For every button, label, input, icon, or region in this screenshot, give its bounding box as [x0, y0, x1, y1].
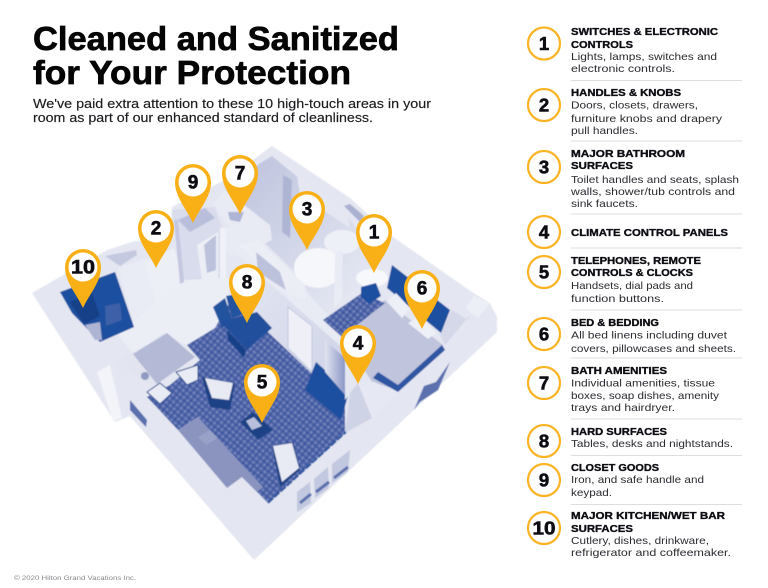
pin 1: 1: [369, 222, 380, 244]
legend item 7: Individual amenities, tissue: [571, 378, 715, 390]
pin 4: [340, 325, 376, 384]
legend item 9: Iron, and safe handle and: [571, 474, 704, 486]
legend item 6: [528, 317, 736, 355]
pin 3: 3: [302, 200, 312, 220]
legend item 1: Lights, lamps, switches and: [571, 51, 717, 63]
pin 6: 6: [417, 278, 427, 300]
wall shading next to tv: [325, 340, 345, 395]
legend item 9: [528, 462, 704, 499]
alcove floor: [213, 190, 272, 248]
legend item 4: CLIMATE CONTROL PANELS: [571, 227, 728, 239]
pin 3: [289, 191, 325, 250]
column at pin four: [345, 382, 398, 433]
legend item 2: furniture knobs and drapery: [571, 113, 723, 125]
pin 7: 7: [235, 164, 245, 184]
legend item 10: Cutlery, dishes, drinkware,: [571, 535, 709, 547]
legend item 10: 10: [532, 518, 556, 538]
legend item 4: [528, 216, 728, 248]
lower windows: [297, 450, 350, 512]
legend item 5: function buttons.: [571, 293, 664, 305]
right wall shading: [440, 310, 470, 345]
legend item 2: HANDLES & KNOBS: [571, 87, 681, 99]
title: [33, 20, 399, 91]
legend item 8: HARD SURFACES: [571, 426, 667, 438]
legend item 10: [528, 510, 731, 559]
legend item 9: keypad.: [571, 487, 612, 499]
top right bathroom wall back: [225, 156, 378, 320]
inner vertical wall: [282, 175, 292, 238]
pin 10: 10: [71, 258, 95, 278]
tv console: [305, 362, 349, 420]
legend item 1: electronic controls.: [571, 63, 675, 75]
left wing wall highlight: [97, 365, 122, 421]
pillows: [387, 293, 410, 318]
bedroom window: [414, 362, 450, 410]
copyright: © 2020 Hilton Grand Vacations Inc.: [14, 574, 136, 582]
legend item 6: 6: [539, 324, 549, 344]
armchair one: [202, 377, 235, 410]
pin 4: 4: [353, 334, 364, 354]
legend item 7: trays and hairdryer.: [571, 402, 675, 414]
legend item 2: pull handles.: [571, 125, 638, 137]
isometric room floor plan: [32, 146, 497, 560]
legend item 1: [528, 26, 718, 75]
left lower wall blue accent: [130, 400, 147, 427]
legend item 3: [528, 148, 739, 210]
bathtub: [294, 248, 342, 288]
legend item 5: TELEPHONES, REMOTE: [571, 255, 701, 267]
living room carpet: [147, 298, 345, 503]
pin 2: 2: [151, 218, 161, 240]
legend item 5: 5: [539, 262, 549, 282]
legend item 4: 4: [539, 222, 550, 242]
bed lower edge: [373, 345, 445, 392]
pin 2: [138, 210, 174, 268]
legend item 7: 7: [539, 372, 549, 394]
left door panels: [118, 258, 156, 321]
corridor floor: [118, 278, 230, 355]
window slit: [344, 204, 364, 222]
legend item 6: BED & BEDDING: [571, 317, 659, 329]
legend item 6: All bed linens including duvet: [571, 330, 727, 342]
bedroom floor: [342, 300, 443, 390]
legend item 8: [528, 425, 733, 457]
legend item 3: MAJOR BATHROOM: [571, 148, 685, 160]
legend item 7: BATH AMENITIES: [571, 365, 667, 377]
vanity wall top band: [297, 175, 350, 228]
legend item 5: Handsets, dial pads and: [571, 280, 693, 292]
pin 10: [65, 249, 101, 308]
legend item 1: CONTROLS: [571, 39, 633, 51]
nightstand: [361, 283, 381, 304]
legend item 9: CLOSET GOODS: [571, 462, 659, 474]
fixture glow: [356, 269, 388, 287]
legend item 3: SURFACES: [571, 160, 633, 172]
desk and chairs: [213, 294, 272, 358]
pin 7: [222, 155, 258, 214]
legend item 2: Doors, closets, drawers,: [571, 100, 698, 112]
intro text: We've paid extra attention to these 10 high-touch areas in your: [33, 97, 431, 111]
legend item 1: 1: [539, 33, 549, 54]
title: Cleaned and Sanitized: [33, 20, 399, 57]
pin 8: [229, 264, 265, 323]
pin 5: 5: [257, 372, 268, 394]
legend item 10: MAJOR KITCHEN/WET BAR: [571, 510, 725, 522]
armchair two: [272, 442, 300, 487]
sofa: [178, 417, 263, 492]
intro text: room as part of our enhanced standard of cleanliness.: [33, 111, 373, 125]
closet room: [172, 207, 222, 290]
legend item 10: refrigerator and coffeemaker.: [571, 547, 731, 559]
legend item 8: 8: [539, 430, 549, 452]
legend item 6: covers, pillowcases and sheets.: [571, 343, 736, 355]
legend item 3: 3: [539, 156, 549, 178]
legend item 7: [528, 365, 720, 414]
pin 5: [244, 364, 280, 423]
kitchen cabinets: [60, 272, 134, 342]
legend item 3: sink faucets.: [571, 198, 638, 210]
legend item 8: Tables, desks and nightstands.: [571, 438, 733, 450]
bar counter: [115, 333, 195, 387]
bedroom carpet: [323, 293, 385, 337]
wall top between closet and living: [226, 225, 345, 350]
door in partition: [288, 307, 312, 372]
legend item 2: 2: [539, 94, 549, 116]
pin 9: [175, 164, 211, 223]
legend item 3: walls, shower/tub controls and: [570, 186, 735, 198]
corner block: [465, 296, 490, 318]
inner small room: [238, 240, 305, 300]
title: for Your Protection: [33, 54, 351, 91]
headboard wall: [387, 265, 450, 333]
legend item 3: Toilet handles and seats, splash: [571, 174, 739, 186]
coffee table: [240, 412, 273, 440]
pin 6: [404, 270, 440, 329]
building outline: [32, 146, 497, 560]
intro text: [33, 97, 431, 125]
pin 1: [356, 214, 392, 273]
legend item 5: [528, 255, 701, 305]
inner edge of bottom wall: [268, 432, 346, 503]
bath partition: [334, 250, 343, 308]
pin 9: 9: [188, 172, 198, 194]
legend item 9: 9: [539, 470, 549, 490]
wall between living and bedroom: [343, 330, 372, 400]
legend item 1: SWITCHES & ELECTRONIC: [571, 26, 718, 38]
legend item 7: boxes, soap dishes, amenity: [571, 390, 720, 402]
living room partition wall face: [232, 250, 345, 405]
legend item 5: CONTROLS & CLOCKS: [571, 267, 693, 279]
bar stools: [147, 383, 172, 404]
legend item 10: SURFACES: [571, 523, 633, 535]
pin 8: 8: [242, 272, 252, 294]
fridge box top: [105, 250, 137, 266]
bar sink: [141, 372, 149, 380]
legend item 2: [528, 87, 723, 137]
